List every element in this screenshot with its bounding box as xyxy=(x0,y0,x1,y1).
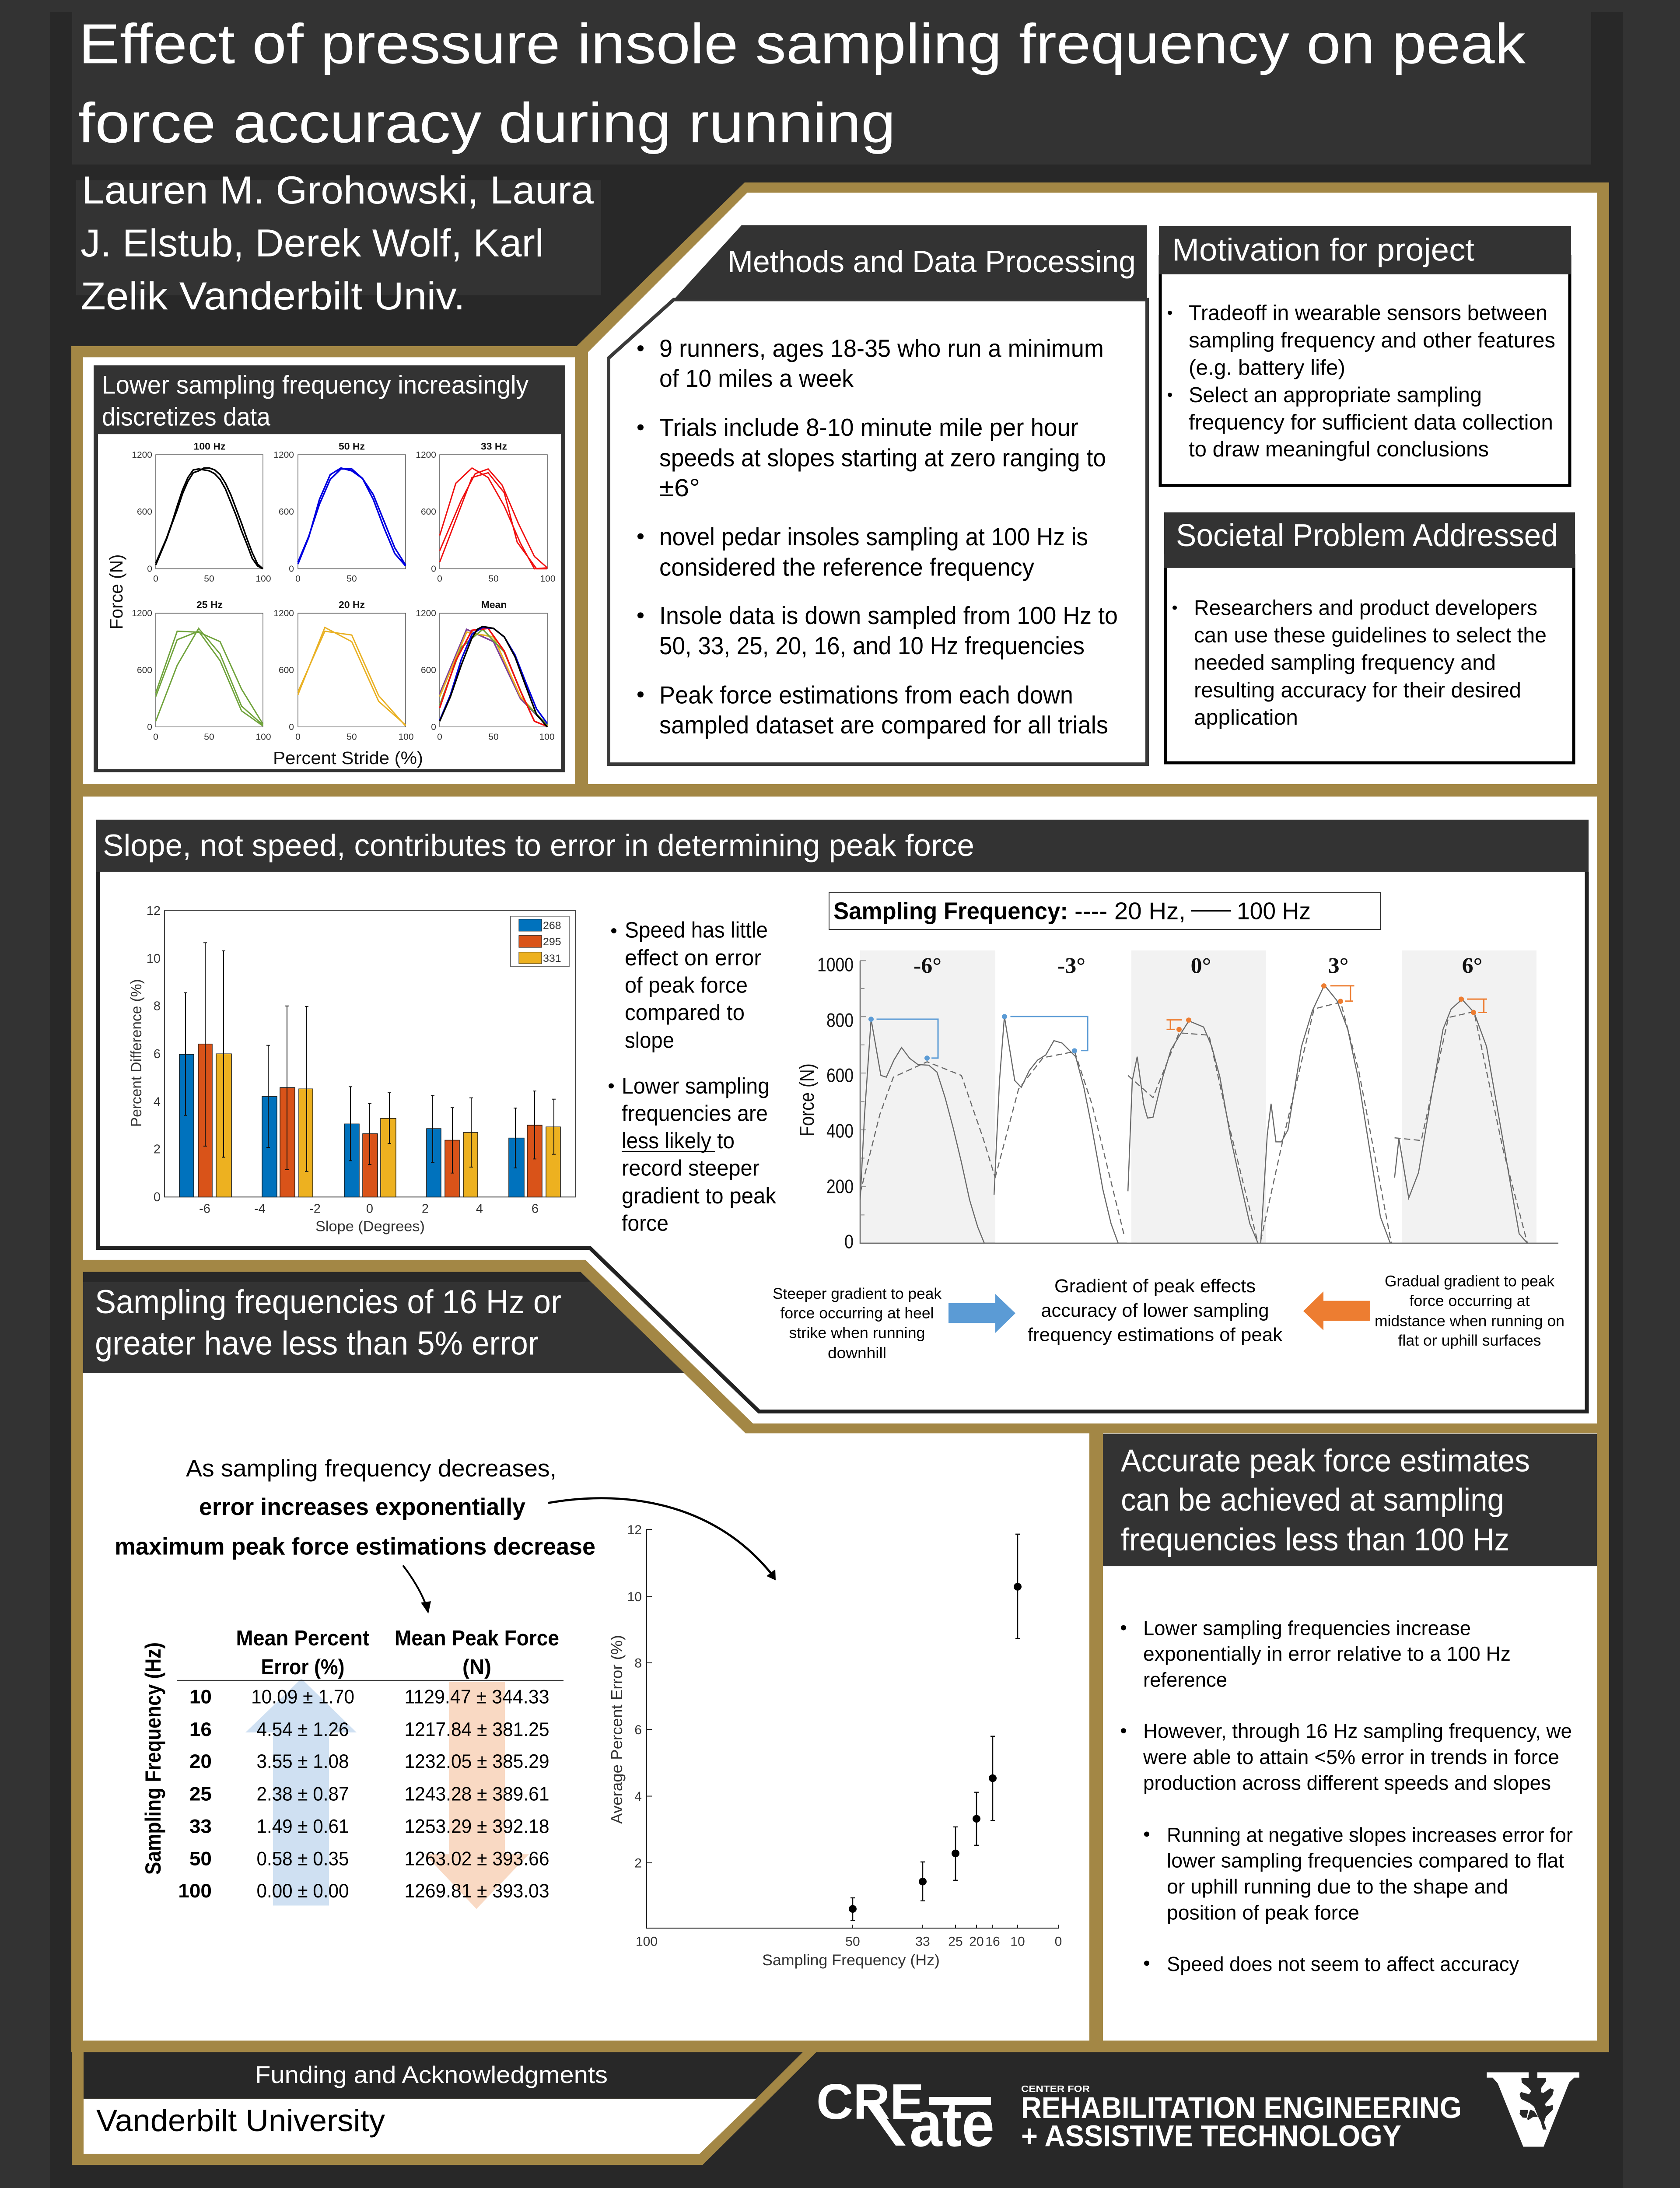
bullet list: societal: application xyxy=(1194,706,1298,729)
bullet list: speed and lower sampling: force xyxy=(622,1210,668,1235)
bullet list: speed and lower sampling: frequencies are xyxy=(622,1101,768,1126)
logo text: center for rehabilitation engineering: + ASSISTIVE TECHNOLOGY xyxy=(1021,2119,1401,2153)
small multiples: force curves by sampling frequency: 33 Hz xyxy=(481,441,507,452)
chart legend xyxy=(511,916,569,967)
panel heading: discretizes xyxy=(102,370,528,431)
scatter chart: average percent error: 4 xyxy=(634,1790,642,1804)
bullet list: methods: Peak force estimations from each down xyxy=(659,681,1073,709)
table: sampling frequency results: Mean Percent xyxy=(236,1626,370,1650)
arrow: blue right xyxy=(948,1294,1015,1333)
text: as sampling frequency decreases xyxy=(115,1455,595,1560)
line chart: force curves by slope xyxy=(796,950,1558,1252)
bullet list: societal: Researchers and product developers xyxy=(1194,596,1537,620)
bullet list: conclusions: Speed does not seem to affect accuracy xyxy=(1167,1953,1519,1975)
bullet list: methods: novel pedar insoles sampling at 100 Hz is xyxy=(659,523,1088,551)
small multiples: force curves by sampling frequency: 600 xyxy=(279,507,294,517)
panel: motivation for project xyxy=(1159,226,1571,485)
small multiples: force curves by sampling frequency: 50 xyxy=(346,574,357,584)
table: sampling frequency results: 0.58 ± 0.35 xyxy=(256,1848,349,1870)
bar chart: percent difference by slope: Percent Difference (%) xyxy=(129,979,145,1127)
panel heading: discretizes: Lower sampling frequency increasingly xyxy=(102,370,528,399)
table: sampling frequency results: 2.38 ± 0.87 xyxy=(256,1783,349,1805)
bullet list: conclusions: lower sampling frequencies compared to flat xyxy=(1167,1849,1564,1872)
line chart: force curves by slope: 800 xyxy=(826,1009,854,1031)
title xyxy=(72,12,1591,165)
small multiples: force curves by sampling frequency: 0 xyxy=(295,732,301,742)
heading: slope: Slope, not speed, contributes to error in determining peak force xyxy=(103,829,974,863)
bullet list: speed and lower sampling: compared to xyxy=(625,1000,745,1025)
small multiples: force curves by sampling frequency: 100 xyxy=(256,732,271,742)
bullet list: conclusions: Lower sampling frequencies increase xyxy=(1143,1617,1471,1639)
callout: steeper gradient: strike when running xyxy=(789,1324,925,1342)
logo: Vanderbilt V with oak leaf xyxy=(1487,2071,1579,2147)
small multiples: force curves by sampling frequency: 0 xyxy=(295,574,301,584)
table: sampling frequency results xyxy=(141,1626,564,1909)
table: sampling frequency results: 25 xyxy=(189,1783,212,1805)
heading: societal: Societal Problem Addressed xyxy=(1176,518,1558,553)
logo text: center for rehabilitation engineering xyxy=(1021,2083,1462,2153)
line chart: force curves by slope: 400 xyxy=(826,1120,854,1142)
bullet list: speed and lower sampling: less likely to xyxy=(622,1128,735,1153)
authors: Lauren M. Grohowski, Laura xyxy=(82,169,594,212)
panel: lower sampling frequency discretizes data xyxy=(94,365,565,772)
small multiples: force curves by sampling frequency: Mean xyxy=(481,599,507,610)
bar chart: percent difference by slope: -2 xyxy=(309,1202,321,1216)
scatter chart: average percent error: 10 xyxy=(1010,1935,1025,1949)
logo: CREATE xyxy=(816,2073,994,2160)
small multiples: force curves by sampling frequency: 1200 xyxy=(273,450,294,460)
small multiples: force curves by sampling frequency: 600 xyxy=(137,665,152,675)
bullet list: methods: sampled dataset are compared for all trials xyxy=(659,711,1108,739)
bullet list: speed and lower sampling: slope xyxy=(625,1027,674,1052)
table: sampling frequency results: 10 xyxy=(189,1686,212,1708)
small multiples: force curves by sampling frequency xyxy=(132,441,556,742)
callout: gradual gradient: flat or uphill surfaces xyxy=(1398,1332,1541,1349)
legend: sampling frequency: ---- 20 Hz, xyxy=(1074,898,1186,924)
table: sampling frequency results: 20 xyxy=(189,1750,212,1772)
authors: J. Elstub, Derek Wolf, Karl xyxy=(80,222,544,265)
bullet list: methods: considered the reference frequency xyxy=(659,554,1034,581)
callout: gradual gradient xyxy=(1375,1273,1564,1349)
scatter chart: average percent error: 8 xyxy=(634,1656,642,1670)
callout: gradual gradient: force occurring at xyxy=(1410,1292,1530,1309)
bullet list: methods: ±6° xyxy=(659,474,700,502)
small multiples: force curves by sampling frequency: 50 xyxy=(488,732,499,742)
bullet list: speed and lower sampling: of peak force xyxy=(625,972,748,997)
panel: societal problem addressed xyxy=(1164,512,1575,763)
small multiples: force curves by sampling frequency: 0 xyxy=(289,722,294,732)
table: sampling frequency results: Sampling Frequency (Hz) xyxy=(141,1642,165,1875)
small multiples: force curves by sampling frequency: 1200 xyxy=(132,450,152,460)
small multiples: force curves by sampling frequency: 600 xyxy=(421,507,436,517)
scatter chart: average percent error: 0 xyxy=(1055,1935,1062,1949)
small multiples: force curves by sampling frequency: 600 xyxy=(421,665,436,675)
bullet list: motivation: (e.g. battery life) xyxy=(1189,356,1345,379)
bullet list: conclusions: or uphill running due to the shape and xyxy=(1167,1876,1508,1898)
small multiples: force curves by sampling frequency: 0 xyxy=(153,574,158,584)
bullet list: societal xyxy=(1172,596,1547,729)
heading: sampling frequencies: greater have less than 5% error xyxy=(95,1325,539,1362)
small multiples: force curves by sampling frequency: 0 xyxy=(437,574,442,584)
bar chart: percent difference by slope: 6 xyxy=(154,1047,161,1061)
bar chart: percent difference by slope: -4 xyxy=(254,1202,266,1216)
scatter chart: average percent error: 100 xyxy=(636,1935,658,1949)
bullet list: motivation xyxy=(1168,301,1555,461)
heading: accurate peak force: can be achieved at sampling xyxy=(1121,1483,1504,1518)
bar chart: percent difference by slope: 8 xyxy=(154,999,161,1013)
small multiples: force curves by sampling frequency: 25 Hz xyxy=(196,599,223,610)
legend: sampling frequency xyxy=(829,892,1380,929)
title: Effect of pressure insole sampling frequency on peak xyxy=(79,12,1526,75)
line chart: force curves by slope: 1000 xyxy=(817,954,854,976)
title: force accuracy during running xyxy=(78,91,896,154)
bullet list: motivation: to draw meaningful conclusions xyxy=(1189,437,1489,461)
line chart: force curves by slope: -3° xyxy=(1057,954,1085,978)
small multiples: force curves by sampling frequency: 0 xyxy=(153,732,158,742)
small multiples: force curves by sampling frequency: 100 Hz xyxy=(194,441,225,452)
bullet list: motivation: Tradeoff in wearable sensors between xyxy=(1189,301,1547,325)
legend: sampling frequency: 100 Hz xyxy=(1237,898,1311,924)
small multiples: force curves by sampling frequency: 0 xyxy=(289,564,294,574)
scatter chart: average percent error: 6 xyxy=(634,1723,642,1737)
line chart: force curves by slope: 0° xyxy=(1191,954,1211,978)
small multiples: force curves by sampling frequency: 0 xyxy=(431,722,436,732)
table: sampling frequency results: 1269.81 ± 393.03 xyxy=(404,1879,549,1902)
arrow: to scatter chart xyxy=(548,1498,776,1580)
line chart: force curves by slope: 3° xyxy=(1328,954,1348,978)
logo text: center for rehabilitation engineering: CENTER FOR xyxy=(1021,2083,1090,2094)
bar chart: percent difference by slope: 10 xyxy=(147,952,161,966)
scatter chart: average percent error: 33 xyxy=(915,1935,930,1949)
small multiples: force curves by sampling frequency: 600 xyxy=(279,665,294,675)
bullet list: speed and lower sampling: gradient to peak xyxy=(622,1183,776,1208)
bullet list: motivation: frequency for sufficient data collection xyxy=(1189,410,1553,434)
line chart: force curves by slope: -6° xyxy=(914,954,942,978)
chart legend: 268 xyxy=(543,920,561,932)
table: sampling frequency results: Error (%) xyxy=(261,1655,344,1679)
line chart: force curves by slope: 6° xyxy=(1462,954,1482,978)
heading: methods: Methods and Data Processing xyxy=(728,245,1136,279)
callout: gradient of peak: Gradient of peak effects xyxy=(1054,1276,1256,1297)
heading: sampling frequencies xyxy=(95,1283,561,1362)
bar chart: percent difference by slope: 4 xyxy=(476,1202,483,1216)
bullet list: methods: 9 runners, ages 18-35 who run a minimum xyxy=(659,335,1104,362)
bar chart: percent difference by slope: 0 xyxy=(154,1190,161,1204)
small multiples: force curves by sampling frequency: 100 xyxy=(539,732,555,742)
table: sampling frequency results: Mean Peak Force xyxy=(395,1626,559,1650)
bullet list: societal: resulting accuracy for their desired xyxy=(1194,678,1521,702)
line chart: force curves by slope: 200 xyxy=(826,1175,854,1197)
callout: gradual gradient: Gradual gradient to peak xyxy=(1385,1273,1554,1290)
small multiples: force curves by sampling frequency: 0 xyxy=(437,732,442,742)
panel: accurate peak force estimates xyxy=(1103,1434,1597,1975)
bar chart: percent difference by slope: Slope (Degrees) xyxy=(315,1219,425,1234)
scatter chart: average percent error: 50 xyxy=(845,1935,860,1949)
small multiples: force curves by sampling frequency: 50 xyxy=(346,732,357,742)
bullet list: conclusions: exponentially in error relative to a 100 Hz xyxy=(1143,1642,1511,1665)
table: sampling frequency results: 0.00 ± 0.00 xyxy=(256,1879,349,1902)
line chart: force curves by slope: 600 xyxy=(826,1064,854,1087)
table: sampling frequency results: 10.09 ± 1.70 xyxy=(251,1686,354,1708)
bullet list: methods: speeds at slopes starting at zero ranging to xyxy=(659,444,1106,472)
callout: gradient of peak: accuracy of lower sampling xyxy=(1041,1300,1269,1321)
scatter chart: average percent error xyxy=(608,1523,1062,1969)
table: sampling frequency results: (N) xyxy=(462,1655,491,1679)
legend: sampling frequency: Sampling Frequency: xyxy=(833,898,1068,924)
scatter chart: average percent error: 10 xyxy=(627,1590,642,1604)
table: sampling frequency results: 3.55 ± 1.08 xyxy=(256,1750,349,1772)
bar chart: percent difference by slope xyxy=(129,904,575,1234)
table: sampling frequency results: 1243.28 ± 389.61 xyxy=(404,1783,549,1805)
callout: steeper gradient: downhill xyxy=(828,1344,886,1361)
table: sampling frequency results: 1232.05 ± 385.29 xyxy=(404,1750,549,1772)
bullet list: motivation: sampling frequency and other features xyxy=(1189,328,1555,352)
panel: funding and acknowledgments xyxy=(84,2052,803,2154)
panel heading: discretizes: discretizes data xyxy=(102,402,270,431)
table: sampling frequency results: 33 xyxy=(189,1815,212,1837)
small multiples: force curves by sampling frequency: 50 xyxy=(488,574,499,584)
table: sampling frequency results: 1263.02 ± 393.66 xyxy=(404,1848,549,1870)
logo text: center for rehabilitation engineering: REHABILITATION ENGINEERING xyxy=(1021,2091,1462,2125)
logo: CREATE: ate xyxy=(910,2089,994,2160)
bullet list: conclusions xyxy=(1121,1617,1573,1975)
small multiples: force curves by sampling frequency: 600 xyxy=(137,507,152,517)
bar chart: percent difference by slope: -6 xyxy=(199,1202,210,1216)
heading: accurate peak force: frequencies less than 100 Hz xyxy=(1121,1522,1509,1557)
bullet list: conclusions: position of peak force xyxy=(1167,1901,1359,1924)
bullet list: methods: of 10 miles a week xyxy=(659,365,854,393)
small multiples: force curves by sampling frequency: 1200 xyxy=(132,608,152,618)
line chart: force curves by slope: 0 xyxy=(844,1231,854,1252)
small multiples: force curves by sampling frequency: 100 xyxy=(256,574,271,584)
text: university: Vanderbilt University xyxy=(96,2104,385,2138)
small multiples: force curves by sampling frequency: 1200 xyxy=(416,608,436,618)
chart legend: 295 xyxy=(543,936,561,948)
bullet list: conclusions: production across different speeds and slopes xyxy=(1143,1771,1551,1794)
small multiples: force curves by sampling frequency: 100 xyxy=(398,732,414,742)
bar chart: percent difference by slope: 12 xyxy=(147,904,161,918)
table: sampling frequency results: 1.49 ± 0.61 xyxy=(256,1815,349,1837)
heading: sampling frequencies: Sampling frequencies of 16 Hz or xyxy=(95,1283,561,1321)
bar chart: percent difference by slope: 0 xyxy=(366,1202,373,1216)
table: sampling frequency results: 1217.84 ± 381.25 xyxy=(404,1718,549,1740)
bullet list: conclusions: Running at negative slopes increases error for xyxy=(1167,1823,1573,1846)
callout: steeper gradient xyxy=(773,1285,942,1361)
table: sampling frequency results: 4.54 ± 1.26 xyxy=(256,1718,349,1740)
table: sampling frequency results: 1253.29 ± 392.18 xyxy=(404,1815,549,1837)
text: as sampling frequency decreases: error increases exponentially xyxy=(199,1494,525,1520)
small multiples: force curves by sampling frequency: 20 Hz xyxy=(339,599,365,610)
table: sampling frequency results: 16 xyxy=(189,1718,212,1740)
bullet list: speed and lower sampling: effect on error xyxy=(625,945,761,970)
scatter chart: average percent error: 20 xyxy=(969,1935,984,1949)
text: as sampling frequency decreases: As sampling frequency decreases, xyxy=(186,1455,556,1482)
callout: gradient of peak xyxy=(1028,1276,1282,1345)
small multiples: force curves by sampling frequency: 0 xyxy=(147,722,152,732)
bullet list: societal: needed sampling frequency and xyxy=(1194,651,1496,674)
small multiples: force curves by sampling frequency: 50 Hz xyxy=(339,441,365,452)
bar chart: percent difference by slope: 4 xyxy=(154,1095,161,1109)
arrow: to table xyxy=(403,1565,431,1614)
bullet list: methods: 50, 33, 25, 20, 16, and 10 Hz frequencies xyxy=(659,632,1085,660)
heading: funding: Funding and Acknowledgments xyxy=(255,2061,608,2088)
heading: accurate peak force xyxy=(1121,1443,1530,1557)
bullet list: speed and lower sampling: record steeper xyxy=(622,1155,760,1180)
bullet list: speed and lower sampling: Lower sampling xyxy=(622,1073,770,1098)
arrow: orange down behind table xyxy=(425,1682,529,1909)
axis label: force: Force (N) xyxy=(106,554,126,629)
bullet list: speed and lower sampling xyxy=(609,917,776,1235)
bullet list: methods: Trials include 8-10 minute mile per hour xyxy=(659,414,1078,442)
heading: accurate peak force: Accurate peak force estimates xyxy=(1121,1443,1530,1478)
bar chart: percent difference by slope: 2 xyxy=(154,1143,161,1157)
scatter chart: average percent error: 25 xyxy=(948,1935,963,1949)
panel: sampling frequencies of 16 Hz or greater xyxy=(83,1272,1062,1969)
small multiples: force curves by sampling frequency: 0 xyxy=(147,564,152,574)
line chart: force curves by slope: Force (N) xyxy=(796,1063,818,1136)
small multiples: force curves by sampling frequency: 1200 xyxy=(416,450,436,460)
scatter chart: average percent error: 16 xyxy=(985,1935,1000,1949)
panel: slope not speed xyxy=(96,820,1589,1412)
scatter chart: average percent error: 12 xyxy=(627,1523,642,1537)
bar chart: percent difference by slope: 6 xyxy=(532,1202,539,1216)
chart legend: 331 xyxy=(543,953,561,964)
heading: motivation: Motivation for project xyxy=(1172,232,1474,268)
callout: gradual gradient: midstance when running on xyxy=(1375,1312,1564,1329)
authors: Zelik Vanderbilt Univ. xyxy=(80,275,465,318)
table: sampling frequency results: 50 xyxy=(189,1848,212,1870)
bullet list: methods: Insole data is down sampled from 100 Hz to xyxy=(659,602,1118,630)
bar chart: percent difference by slope: 2 xyxy=(422,1202,429,1216)
callout: steeper gradient: force occurring at heel xyxy=(780,1304,934,1322)
small multiples: force curves by sampling frequency: 1200 xyxy=(273,608,294,618)
small multiples: force curves by sampling frequency: 50 xyxy=(204,732,214,742)
bullet list: societal: can use these guidelines to select the xyxy=(1194,623,1547,647)
text: as sampling frequency decreases: maximum peak force estimations decrease xyxy=(115,1533,595,1560)
bullet list: conclusions: reference xyxy=(1143,1669,1227,1691)
bullet list: conclusions: were able to attain <5% error in trends in force xyxy=(1143,1746,1559,1768)
axis label: percent stride: Percent Stride (%) xyxy=(273,748,423,768)
bullet list: methods xyxy=(637,335,1118,739)
scatter chart: average percent error: Sampling Frequency (Hz) xyxy=(762,1952,940,1969)
panel: methods and data processing xyxy=(609,225,1147,764)
bullet list: speed and lower sampling: Speed has little xyxy=(625,917,768,942)
small multiples: force curves by sampling frequency: 100 xyxy=(540,574,556,584)
callout: steeper gradient: Steeper gradient to peak xyxy=(773,1285,942,1302)
small multiples: force curves by sampling frequency: 50 xyxy=(204,574,214,584)
callout: gradient of peak: frequency estimations of peak xyxy=(1028,1325,1282,1345)
table: sampling frequency results: 1129.47 ± 344.33 xyxy=(404,1686,549,1708)
arrow: orange left xyxy=(1303,1291,1370,1330)
table: sampling frequency results: 100 xyxy=(178,1879,212,1902)
bullet list: motivation: Select an appropriate sampling xyxy=(1189,383,1482,407)
scatter chart: average percent error: 2 xyxy=(634,1856,642,1870)
scatter chart: average percent error: Average Percent Error (%) xyxy=(608,1635,626,1824)
logo: CREATE: CRE xyxy=(816,2073,924,2129)
arrow: blue up behind table xyxy=(245,1679,357,1905)
small multiples: force curves by sampling frequency: 0 xyxy=(431,564,436,574)
bullet list: conclusions: However, through 16 Hz sampling frequency, we xyxy=(1143,1720,1572,1743)
authors xyxy=(76,169,601,318)
